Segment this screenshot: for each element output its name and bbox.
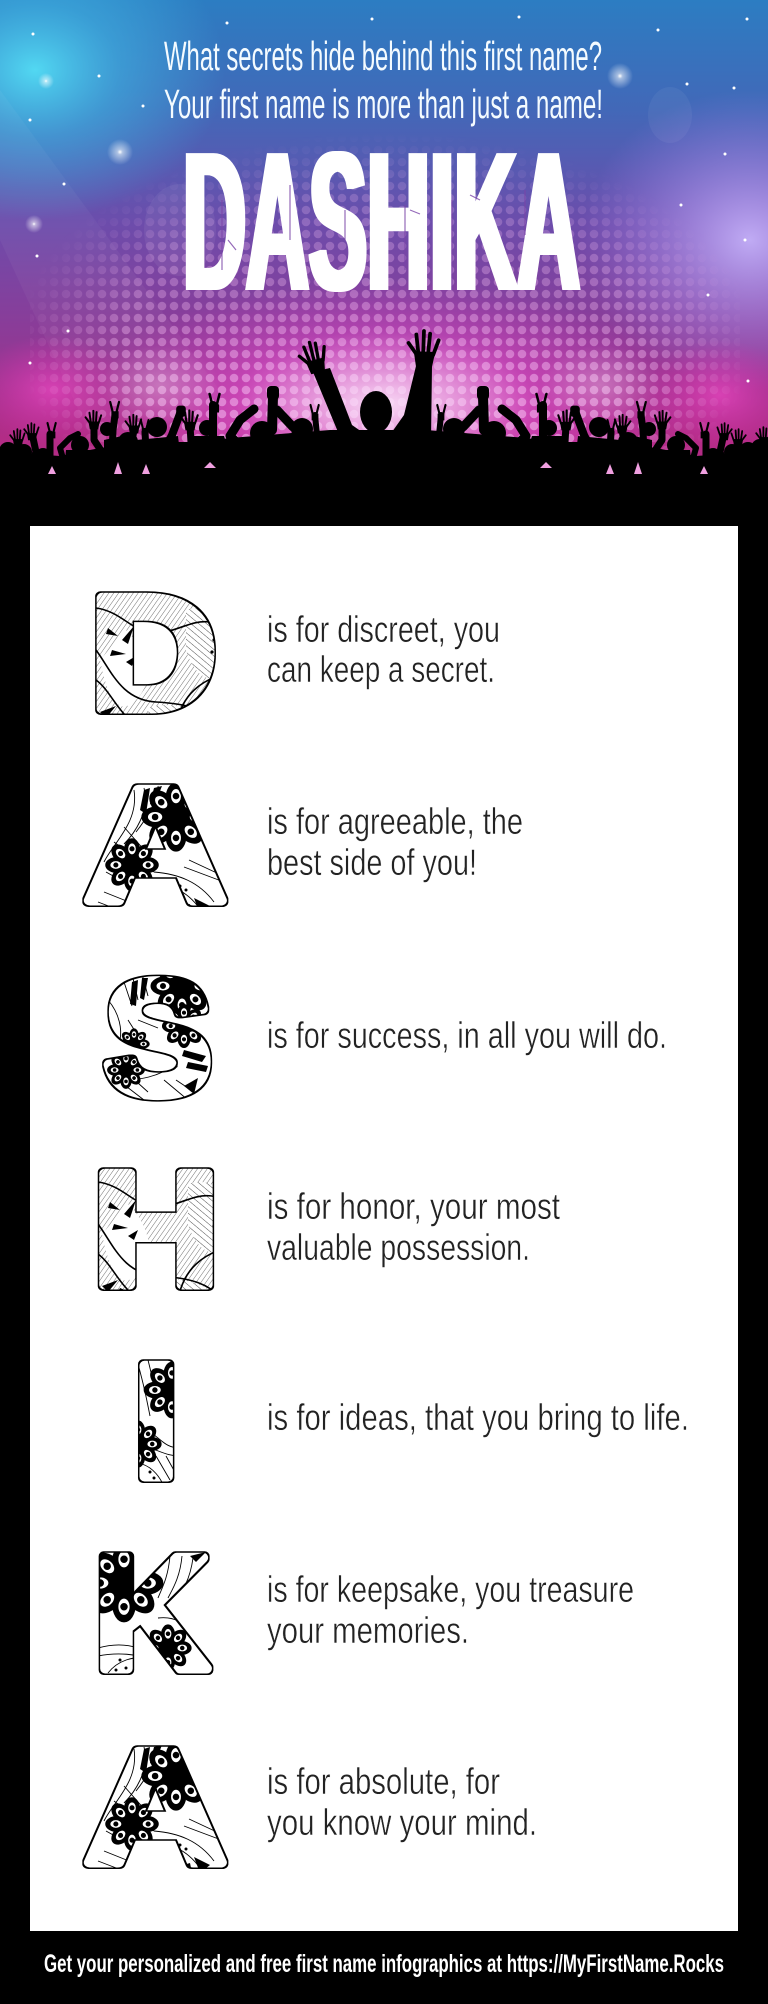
row A: agreeable: best side of you! — [267, 842, 477, 883]
row A: absolute: you know your mind. — [267, 1802, 537, 1843]
icon: mandala letter H: H — [93, 1140, 219, 1320]
row H: honor — [93, 1140, 561, 1320]
row D: discreet: can keep a secret. — [267, 649, 495, 690]
row K: keepsake: your memories. — [267, 1610, 469, 1651]
icon: mandala letter K: K — [94, 1524, 208, 1704]
row A: agreeable: is for agreeable, the — [267, 801, 523, 842]
icon: mandala letter A: A — [85, 756, 226, 936]
header text: tagline — [164, 33, 603, 127]
sparkles — [25, 16, 750, 382]
row S: success — [104, 948, 667, 1128]
panel: white letter list — [30, 526, 738, 1931]
row A: agreeable — [85, 756, 523, 936]
panel: concert header background — [0, 0, 768, 456]
row H: honor: valuable possession. — [267, 1227, 530, 1268]
icon: mandala letter A: A — [85, 1718, 226, 1898]
row D: discreet — [90, 564, 500, 744]
row S: success: is for success, in all you will do. — [267, 1015, 667, 1056]
icon: mandala letter D: D — [90, 564, 216, 744]
row H: honor: is for honor, your most — [267, 1186, 561, 1227]
name title — [183, 111, 580, 333]
icon: mandala letter I: I — [134, 1332, 179, 1512]
row K: keepsake: is for keepsake, you treasure — [267, 1569, 634, 1610]
crowd silhouette — [0, 330, 768, 526]
row D: discreet: is for discreet, you — [267, 609, 500, 650]
row K: keepsake — [94, 1524, 634, 1704]
icon: mandala letter S: S — [104, 948, 212, 1128]
row I: ideas — [134, 1332, 689, 1512]
row A: absolute: is for absolute, for — [267, 1761, 500, 1802]
row A: absolute — [85, 1718, 537, 1898]
main figure with raised arms — [297, 330, 440, 470]
